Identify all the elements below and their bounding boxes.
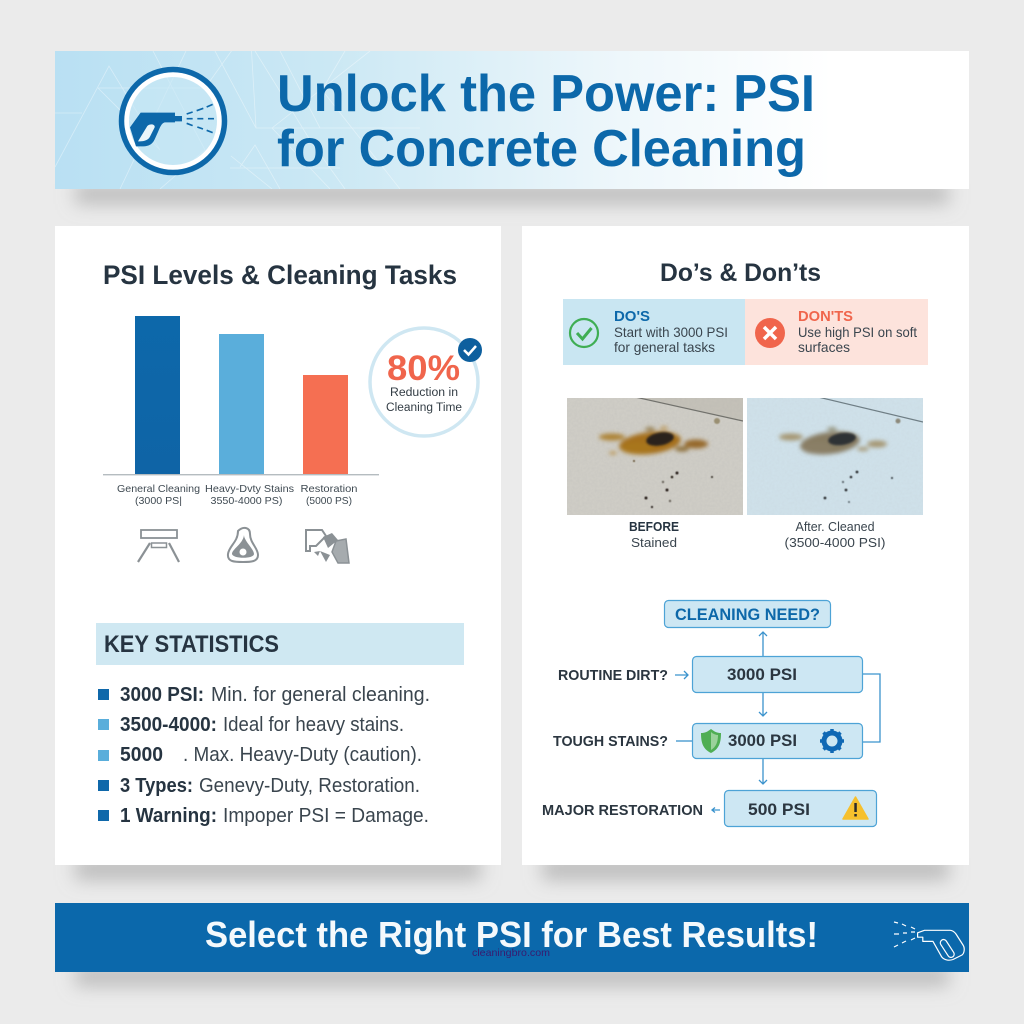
flow node: routine dirt: ROUTINE DIRT? — [558, 667, 668, 684]
icon: warning triangle — [843, 797, 868, 819]
footer banner — [55, 903, 969, 972]
call to action: Select the Right PSI for Best Results! — [205, 914, 818, 955]
icon: green check — [570, 319, 598, 347]
decorative triangle pattern — [55, 51, 420, 189]
bar chart: (3000 PS| — [135, 495, 182, 507]
flow node: tough stains — [553, 724, 862, 758]
flowchart — [542, 600, 880, 826]
callout: 80 percent: Cleaning Time — [386, 402, 462, 414]
statistics list: 3500-4000: — [120, 714, 217, 736]
photo captions: Stained — [631, 535, 677, 550]
heading: PSI levels: PSI Levels & Cleaning Tasks — [103, 260, 457, 290]
callout: 80 percent: 80% — [387, 349, 460, 388]
icon: check badge — [458, 338, 482, 362]
icon: red cross — [755, 318, 785, 348]
icon: oil stain — [228, 528, 258, 562]
statistics list: Min. for general cleaning. — [211, 684, 430, 706]
photo captions: (3500-4000 PSI) — [784, 535, 886, 550]
icon: pressure washer outline — [894, 922, 964, 960]
bar chart: 3550-4000 PS) — [210, 495, 282, 507]
panel: do's and don'ts — [522, 226, 969, 865]
statistics list: 5000 — [120, 744, 163, 766]
statistics list: 1 Warning: — [120, 805, 217, 827]
panel: PSI levels and statistics — [55, 226, 501, 865]
photo captions: BEFORE — [629, 519, 679, 534]
drop shadows — [75, 184, 949, 986]
flow node: major restoration: MAJOR RESTORATION — [542, 802, 703, 819]
statistics list: . Max. Heavy-Duty (caution). — [183, 744, 422, 766]
flow node: routine dirt — [558, 656, 862, 692]
callout: 80 percent: Reduction in — [390, 387, 458, 399]
photo: before — [567, 397, 743, 515]
do's box — [563, 299, 745, 365]
watermark: cleaningbro.com — [472, 947, 550, 959]
flow node: major restoration — [542, 790, 876, 826]
don'ts box — [745, 299, 928, 365]
bar chart: General Cleaning — [117, 483, 200, 495]
heading: key statistics — [96, 623, 464, 665]
flow node: tough stains: 3000 PSI — [728, 731, 797, 750]
statistics list: 3000 PSI: — [120, 684, 204, 706]
flow node: tough stains: TOUGH STAINS? — [553, 733, 668, 750]
don'ts box: surfaces — [798, 339, 850, 355]
statistics list: Genevy-Duty, Restoration. — [199, 775, 420, 797]
heading: do's and don'ts: Do’s & Don’ts — [660, 259, 821, 287]
don'ts box: Use high PSI on soft — [798, 324, 917, 340]
callout: 80 percent — [370, 328, 482, 436]
bar chart: Heavy-Dvty Stains — [205, 483, 294, 495]
flow node: major restoration: 500 PSI — [748, 800, 810, 819]
photo captions — [629, 519, 886, 550]
photo captions: After. Cleaned — [796, 519, 874, 534]
icon: pressure washer in circle — [122, 70, 224, 172]
statistics list: 3 Types: — [120, 775, 193, 797]
don'ts box: DON'TS — [798, 308, 853, 325]
do's box: for general tasks — [614, 339, 715, 355]
flow node: cleaning need: CLEANING NEED? — [675, 605, 820, 624]
bar chart — [103, 316, 379, 507]
title — [277, 65, 815, 178]
bar chart: (5000 PS) — [306, 495, 352, 507]
flow node: routine dirt: 3000 PSI — [727, 665, 797, 684]
icon: restoration — [306, 530, 349, 563]
do's box: DO'S — [614, 308, 650, 325]
photo: after — [747, 397, 923, 515]
heading: key statistics: KEY STATISTICS — [104, 631, 279, 658]
flow node: cleaning need — [664, 600, 830, 628]
icon: green shield — [701, 729, 721, 753]
header banner — [55, 51, 969, 189]
icon: blue gear — [820, 729, 844, 753]
statistics list: Impoper PSI = Damage. — [223, 805, 429, 827]
title: Unlock the Power: PSI — [277, 65, 815, 123]
do's box: Start with 3000 PSI — [614, 324, 728, 340]
bar chart: Restoration — [300, 483, 358, 495]
icon: surface cleaner — [138, 530, 179, 562]
title: for Concrete Cleaning — [277, 120, 806, 178]
statistics list — [98, 684, 430, 827]
flow arrows and connectors — [675, 632, 880, 812]
statistics list: Ideal for heavy stains. — [223, 714, 404, 736]
